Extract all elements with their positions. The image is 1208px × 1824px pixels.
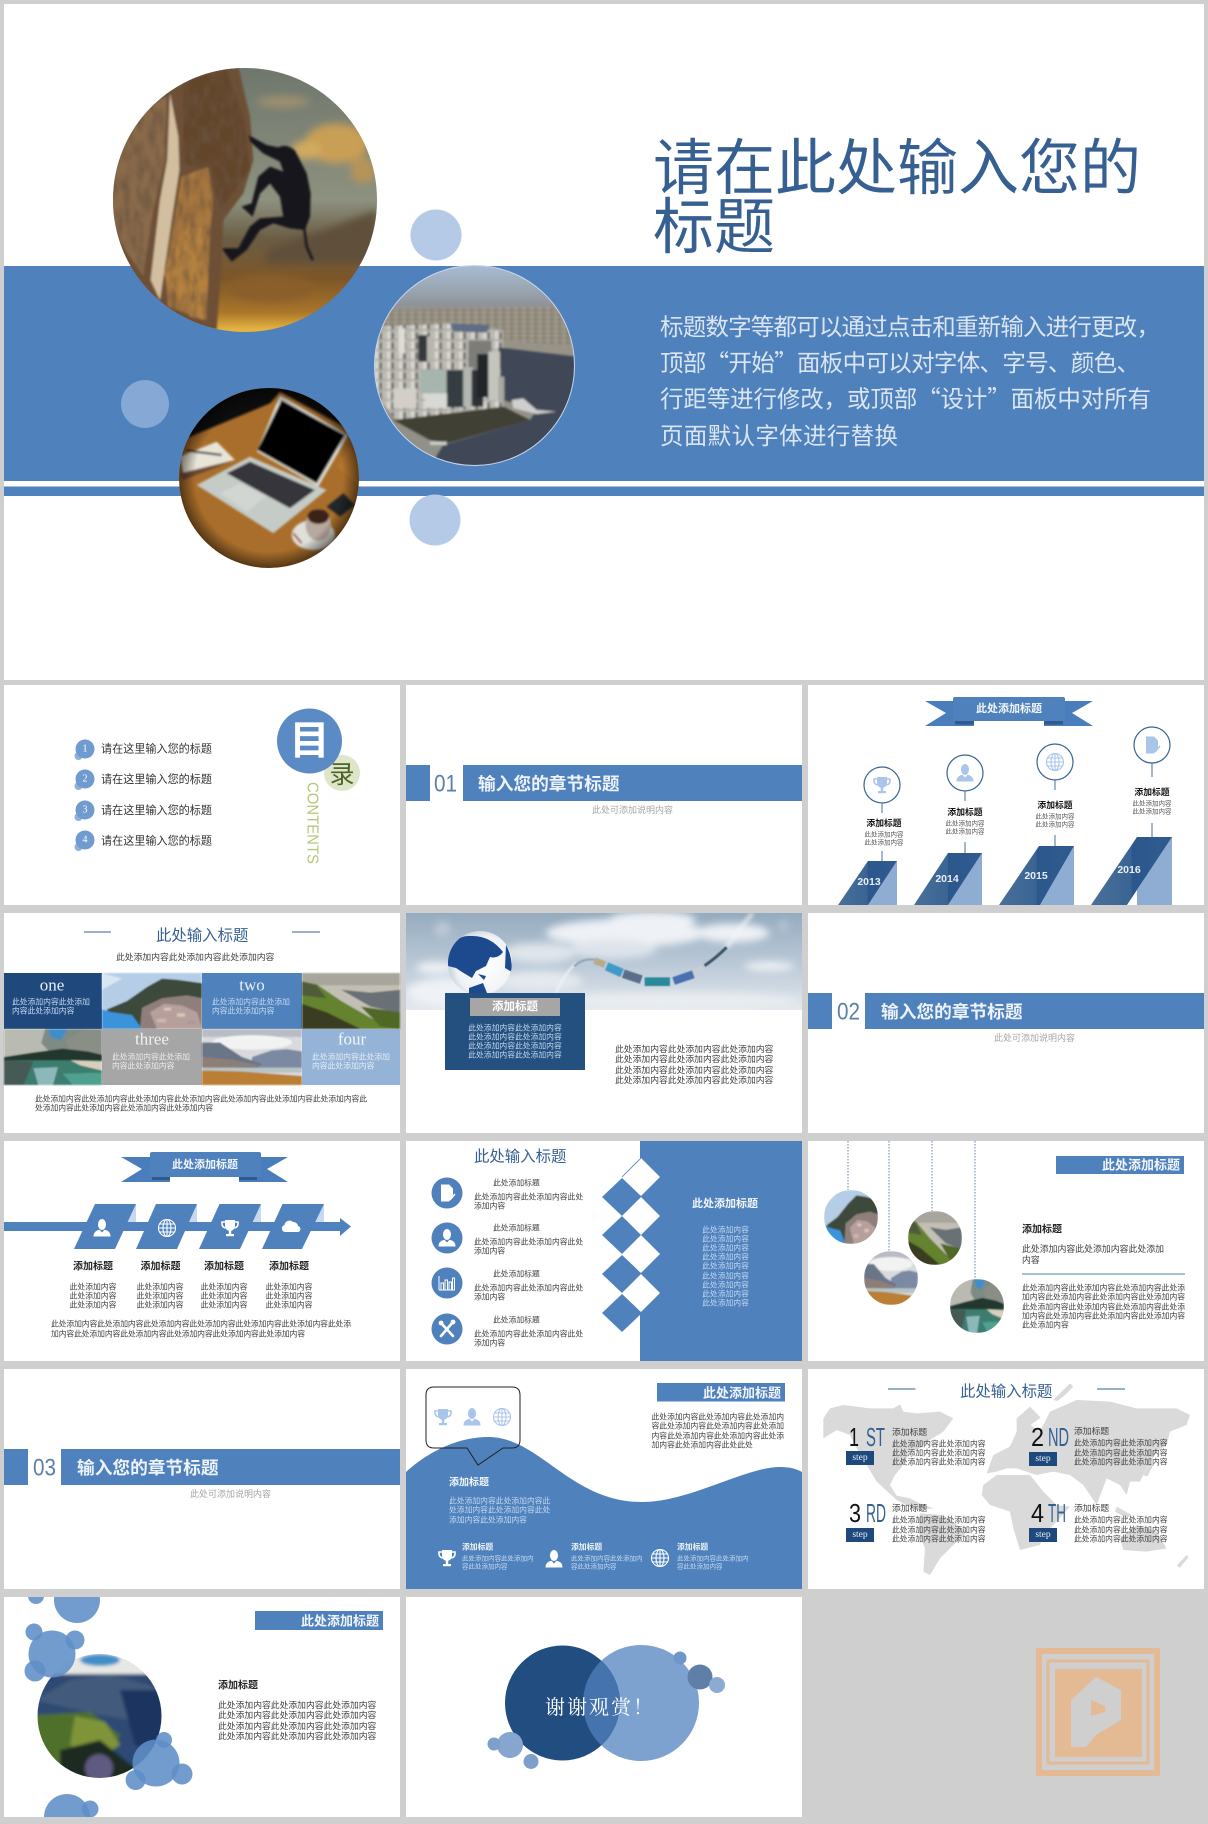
description: 标题数字等都可以通过点击和重新输入进行更改， <box>660 308 1160 342</box>
feature 2: 此处添加内容此处添加内 <box>571 1554 642 1562</box>
heading: 此处输入标题 <box>960 1382 1052 1400</box>
callout box: 此处添加内容此处添加内容 <box>468 1032 562 1042</box>
step labels: 此处添加内容 <box>201 1300 248 1310</box>
目录 badge: 录 <box>329 761 355 789</box>
feature 3: 容此处添加内容 <box>677 1562 723 1570</box>
timeline step 2015 <box>999 744 1075 905</box>
panel heading and text: 此处添加内容 <box>702 1252 749 1262</box>
landscape photo circle <box>38 1654 162 1778</box>
panel: wave slide <box>406 1369 802 1589</box>
film strip ribbon <box>574 947 727 982</box>
tile: one <box>4 973 102 1029</box>
header tag <box>255 1611 383 1630</box>
diamond column <box>602 1158 660 1332</box>
list item 2: 添加内容 <box>474 1246 505 1256</box>
contents list: 3 <box>82 804 88 816</box>
panel: section 02 <box>808 913 1204 1133</box>
step labels: 添加标题 <box>73 1260 113 1272</box>
step labels: 添加标题 <box>140 1260 180 1272</box>
contents list: 4 <box>82 834 88 846</box>
text block: 此处添加内容此处添加内容此处添加内容 <box>218 1730 377 1741</box>
step 1ST: 此处添加内容此处添加内容 <box>892 1438 986 1448</box>
header tag <box>1056 1156 1184 1174</box>
tile: one: 内容此处添加内容 <box>12 1006 75 1016</box>
step 1ST: step <box>852 1453 868 1463</box>
thin blue stripe <box>4 486 1204 496</box>
section number: 03 <box>33 1454 56 1482</box>
header tag: 此处添加标题 <box>301 1614 379 1628</box>
panel: cover slide <box>4 4 1204 680</box>
panel heading and text: 此处添加标题 <box>692 1196 758 1210</box>
sky banner photo <box>406 911 802 1010</box>
step labels: 此处添加内容 <box>266 1282 313 1292</box>
step labels: 此处添加内容 <box>70 1290 117 1300</box>
step 1ST: 此处添加内容此处添加内容 <box>892 1456 986 1466</box>
timeline step 2016: 2016 <box>1117 864 1141 876</box>
step 3RD: 此处添加内容此处添加内容 <box>892 1534 986 1544</box>
step labels <box>70 1260 313 1310</box>
panel: diamonds list slide <box>406 1141 802 1361</box>
bubble cluster <box>24 1597 192 1817</box>
step 4TH: 4 <box>1031 1498 1044 1528</box>
ribbon heading: 此处添加标题 <box>976 701 1042 715</box>
wave text: 添加内容此处添加内容 <box>449 1514 527 1524</box>
step 1ST: 添加标题 <box>892 1426 927 1437</box>
header tag: 此处添加标题 <box>703 1386 781 1400</box>
feature 3: 此处添加内容此处添加内 <box>677 1554 748 1562</box>
step 2ND: 2 <box>1031 1422 1044 1452</box>
photo: climber <box>110 60 380 340</box>
text block <box>218 1678 377 1741</box>
callout box: 此处添加内容此处添加内容 <box>468 1022 562 1032</box>
body text: 此处添加内容此处添加内容此处添加内容 <box>615 1064 774 1075</box>
step 2ND <box>1029 1422 1168 1466</box>
step labels: 此处添加内容 <box>201 1290 248 1300</box>
panel: section 03 <box>4 1369 400 1589</box>
feature 2: 添加标题 <box>571 1542 602 1552</box>
right text <box>652 1412 784 1450</box>
timeline step 2015: 此处添加内容 <box>1036 820 1075 828</box>
description: 顶部“开始”面板中可以对字体、字号、颜色、 <box>660 344 1140 378</box>
feature 1: 添加标题 <box>462 1542 493 1552</box>
step labels: 此处添加内容 <box>266 1300 313 1310</box>
decorative dot: bottom <box>410 494 460 546</box>
step labels: 此处添加内容 <box>201 1282 248 1292</box>
heading: 此处输入标题 <box>156 926 248 944</box>
section number: 01 <box>434 770 457 798</box>
tile: one: one <box>40 976 64 994</box>
callout box <box>445 993 585 1070</box>
thank you text: 谢谢观赏！ <box>545 1696 653 1719</box>
title <box>653 134 1141 261</box>
feature 3 <box>652 1542 748 1570</box>
photo: green mountain <box>302 973 400 1029</box>
timeline step 2013: 2013 <box>857 876 881 888</box>
tile: two: 内容此处添加内容 <box>212 1006 275 1016</box>
globe icon <box>446 931 512 996</box>
blue wave <box>406 1437 802 1589</box>
description: 行距等进行修改，或顶部“设计”面板中对所有 <box>660 380 1151 414</box>
hanging strings <box>848 1141 975 1279</box>
step labels: 此处添加内容 <box>266 1290 313 1300</box>
overlapping circles <box>505 1645 699 1761</box>
panel heading and text: 此处添加内容 <box>702 1288 749 1298</box>
panel: world map slide <box>808 1369 1204 1589</box>
callout box: 添加标题 <box>492 999 538 1013</box>
panel: photo tiles slide <box>4 913 400 1133</box>
step 3RD: 3 <box>849 1498 861 1528</box>
step 3RD: step <box>852 1530 868 1540</box>
list item 3: 此处添加内容此处添加内容此处 <box>474 1282 583 1292</box>
panel: hanging photos slide <box>808 1141 1204 1361</box>
timeline step 2016: 添加标题 <box>1134 786 1170 797</box>
timeline step 2013: 此处添加内容 <box>864 830 904 838</box>
contents list: 请在这里输入您的标题 <box>101 803 212 817</box>
panel heading and text: 此处添加内容 <box>702 1234 749 1244</box>
contents list: 请在这里输入您的标题 <box>101 772 212 786</box>
tile: four: 内容此处添加内容 <box>312 1060 375 1070</box>
photo ball: lake <box>950 1279 1004 1333</box>
photo ball: green mountain <box>908 1211 962 1265</box>
panel: globe slide <box>406 911 802 1133</box>
text block: 此处添加内容此处添加内容此处添加内容此处添 <box>1022 1302 1185 1312</box>
text block: 内容 <box>1022 1254 1040 1265</box>
timeline step 2013 <box>838 767 904 905</box>
timeline step 2016: 此处添加内容 <box>1132 798 1172 808</box>
blue band <box>4 266 1204 481</box>
section note: 此处可添加说明内容 <box>190 1488 271 1499</box>
contents list: 2 <box>82 774 88 784</box>
panel: bubbles photo slide <box>4 1597 400 1817</box>
callout box: 此处添加内容此处添加内容 <box>468 1050 562 1060</box>
photo: coastal village <box>102 973 202 1029</box>
step labels: 添加标题 <box>204 1260 244 1272</box>
tile: three: 此处添加内容此处添加 <box>112 1052 190 1062</box>
decorative dot: top <box>410 210 462 260</box>
feature 2: 容此处添加内容 <box>571 1562 617 1570</box>
step 3RD: RD <box>866 1498 886 1528</box>
city ring <box>374 266 574 466</box>
timeline step 2013: 添加标题 <box>866 817 902 828</box>
right text: 此处添加内容此处添加内容此处添加内 <box>652 1412 784 1422</box>
step 2ND: 添加标题 <box>1074 1425 1109 1436</box>
satellite bubbles <box>488 1652 725 1769</box>
contents list: 1 <box>82 744 88 754</box>
right text: 容此处添加内容此处添加内容此处添加 <box>652 1420 784 1430</box>
panel: arrow process slide <box>4 1141 400 1361</box>
photo: city <box>370 263 580 470</box>
step 3RD: 添加标题 <box>892 1502 927 1513</box>
list item 4: 此处添加标题 <box>493 1314 540 1324</box>
目录 badge: 目 <box>290 719 330 763</box>
timeline step 2014: 此处添加内容 <box>946 826 985 836</box>
list item 1 <box>432 1178 583 1210</box>
text block: 加内容此处添加内容此处添加内容此处添加内容 <box>1022 1292 1185 1302</box>
timeline step 2016 <box>1091 727 1172 905</box>
section title: 输入您的章节标题 <box>77 1457 219 1478</box>
contents list: 请在这里输入您的标题 <box>101 742 212 756</box>
body text: 加内容此处添加内容此处添加内容此处添加内容此处添加内容此处添加内容 <box>51 1328 305 1338</box>
contents list: 请在这里输入您的标题 <box>101 834 212 848</box>
text block: 此处添加内容此处添加内容此处添加内容 <box>218 1709 377 1720</box>
subheading: 此处添加内容此处添加内容此处添加内容 <box>116 951 275 962</box>
tile: four: four <box>338 1030 366 1048</box>
photo ball: village <box>824 1190 878 1244</box>
step 2ND: 此处添加内容此处添加内容 <box>1074 1456 1168 1466</box>
world map <box>823 1383 1190 1575</box>
body text: 处添加内容此处添加内容此处添加内容此处添加内容 <box>35 1102 213 1112</box>
panel: contents slide <box>4 685 400 905</box>
text block: 此处添加内容此处添加内容此处添加 <box>1022 1243 1164 1254</box>
speech bubble with icons <box>426 1387 520 1465</box>
list item 4: 此处添加内容此处添加内容此处 <box>474 1328 583 1338</box>
step 3RD: 此处添加内容此处添加内容 <box>892 1514 986 1524</box>
text block: 添加标题 <box>218 1678 258 1692</box>
step 4TH <box>1029 1498 1168 1544</box>
header tag: 此处添加标题 <box>1102 1158 1180 1172</box>
list item 3: 此处添加标题 <box>493 1268 540 1278</box>
目录 badge <box>277 708 360 791</box>
panel heading and text: 此处添加内容 <box>702 1298 749 1308</box>
step 4TH: step <box>1035 1530 1051 1540</box>
step labels: 此处添加内容 <box>70 1282 117 1292</box>
tile: three <box>102 1029 202 1085</box>
list item 1: 添加内容 <box>474 1200 505 1210</box>
timeline step 2014: 2014 <box>935 873 959 885</box>
right blue panel <box>640 1141 802 1361</box>
feature 1: 容此处添加内容 <box>462 1562 508 1570</box>
panel: timeline slide <box>808 685 1204 905</box>
step 3RD: 此处添加内容此处添加内容 <box>892 1524 986 1534</box>
title: 请在此处输入您的 <box>653 134 1141 202</box>
timeline step 2016: 此处添加内容 <box>1132 806 1172 816</box>
body text: 此处添加内容此处添加内容此处添加内容 <box>615 1053 774 1064</box>
step labels: 此处添加内容 <box>137 1300 184 1310</box>
step 2ND: step <box>1035 1454 1051 1464</box>
text block <box>1022 1222 1185 1330</box>
step 3RD <box>846 1498 986 1544</box>
text block: 加内容此处添加内容此处添加内容此处添加内容 <box>1022 1310 1185 1320</box>
step 4TH: 此处添加内容此处添加内容 <box>1074 1524 1168 1534</box>
photo ball: desert <box>864 1251 918 1305</box>
timeline step 2015: 2015 <box>1024 870 1048 882</box>
timeline step 2015: 此处添加内容 <box>1036 812 1075 820</box>
step labels: 添加标题 <box>269 1260 309 1272</box>
tile: three: three <box>135 1030 169 1048</box>
step 2ND: ND <box>1048 1422 1069 1452</box>
tile: one: 此处添加内容此处添加 <box>12 996 90 1006</box>
body text: 此处添加内容此处添加内容此处添加内容 <box>615 1043 774 1054</box>
step tiles <box>74 1204 324 1249</box>
step labels: 此处添加内容 <box>137 1282 184 1292</box>
process arrow <box>4 1218 351 1236</box>
text block: 此处添加内容此处添加内容此处添加内容此处添 <box>1022 1282 1185 1292</box>
panel heading and text: 此处添加内容 <box>702 1260 749 1270</box>
tile: two: 此处添加内容此处添加 <box>212 996 290 1006</box>
list item 1: 此处添加内容此处添加内容此处 <box>474 1192 583 1202</box>
body text: 此处添加内容此处添加内容此处添加内容此处添加内容此处添加内容此处添加内容此处添 <box>51 1318 351 1328</box>
step 2ND: 此处添加内容此处添加内容 <box>1074 1438 1168 1448</box>
feature 1: 此处添加内容此处添加内 <box>462 1554 534 1562</box>
tile: four: 此处添加内容此处添加 <box>312 1052 390 1062</box>
ribbon heading: 此处添加标题 <box>172 1157 238 1171</box>
step labels: 此处添加内容 <box>137 1290 184 1300</box>
body text <box>615 1043 774 1085</box>
list item 3 <box>432 1268 583 1302</box>
feature 1 <box>439 1542 534 1570</box>
decorative dot: band <box>121 380 169 428</box>
wave text: 此处添加内容此处添加内容此 <box>449 1496 551 1506</box>
section title: 输入您的章节标题 <box>478 773 620 794</box>
section title: 输入您的章节标题 <box>881 1001 1023 1022</box>
panel heading and text: 此处添加内容 <box>702 1280 749 1290</box>
tile: three: 内容此处添加内容 <box>112 1060 175 1070</box>
list item 2: 此处添加标题 <box>493 1222 540 1232</box>
timeline step 2014: 添加标题 <box>947 806 983 817</box>
text block: 此处添加内容 <box>1022 1320 1069 1330</box>
list item 2 <box>432 1222 583 1256</box>
panel heading and text: 此处添加内容 <box>702 1270 749 1280</box>
heading: 此处输入标题 <box>474 1148 566 1166</box>
description <box>660 308 1160 451</box>
callout box: 此处添加内容此处添加内容 <box>468 1040 562 1050</box>
list item 4 <box>432 1314 583 1348</box>
timeline step 2014 <box>914 755 985 905</box>
text block: 添加标题 <box>1022 1222 1062 1236</box>
panel heading and text <box>692 1196 758 1308</box>
ribbon heading <box>121 1152 288 1182</box>
right text: 加内容此处添加内容此处此处 <box>652 1440 753 1450</box>
section number: 02 <box>837 998 860 1026</box>
text block: 此处添加内容此处添加内容此处添加内容 <box>218 1720 377 1731</box>
ribbon heading <box>925 697 1093 726</box>
list item 2: 此处添加内容此处添加内容此处 <box>474 1236 583 1246</box>
body text: 此处添加内容此处添加内容此处添加内容此处添加内容此处添加内容此处添加内容此处添加内容此 <box>35 1094 367 1104</box>
photo: mountain lake <box>4 1029 102 1085</box>
step labels: 此处添加内容 <box>70 1300 117 1310</box>
tile: two <box>202 973 302 1029</box>
step 2ND: 此处添加内容此处添加内容 <box>1074 1448 1168 1458</box>
tile: four <box>302 1029 400 1085</box>
step 1ST: ST <box>866 1422 885 1452</box>
wave text <box>449 1476 551 1524</box>
step 4TH: 此处添加内容此处添加内容 <box>1074 1514 1168 1524</box>
step 1ST: 此处添加内容此处添加内容 <box>892 1448 986 1458</box>
body text <box>51 1318 351 1338</box>
feature 3: 添加标题 <box>677 1542 708 1552</box>
step 4TH: TH <box>1048 1498 1066 1528</box>
tile: two: two <box>239 976 265 994</box>
wave text: 添加标题 <box>449 1476 489 1488</box>
panel heading and text: 此处添加内容 <box>702 1242 749 1252</box>
timeline step 2013: 此处添加内容 <box>864 838 904 846</box>
description: 页面默认字体进行替换 <box>660 417 898 451</box>
contents list <box>74 740 212 851</box>
list item 1: 此处添加标题 <box>493 1178 540 1188</box>
list item 4: 添加内容 <box>474 1338 505 1348</box>
CONTENTS vertical label: CONTENTS <box>304 782 320 864</box>
title: 标题 <box>653 193 775 261</box>
panel: section 01 <box>406 685 802 905</box>
panel: thank you slide <box>406 1597 802 1817</box>
step 4TH: 添加标题 <box>1074 1502 1109 1513</box>
step 4TH: 此处添加内容此处添加内容 <box>1074 1534 1168 1544</box>
body text <box>35 1094 367 1112</box>
feature 2 <box>546 1542 642 1570</box>
photo: desert lake <box>202 1029 302 1085</box>
step 1ST: 1 <box>849 1422 859 1452</box>
section note: 此处可添加说明内容 <box>994 1032 1075 1043</box>
text block: 此处添加内容此处添加内容此处添加内容 <box>218 1699 377 1710</box>
timeline step 2015: 添加标题 <box>1037 799 1073 810</box>
body text: 此处添加内容此处添加内容此处添加内容 <box>615 1074 774 1085</box>
wave text: 处添加内容此处添加内容此处 <box>449 1504 551 1514</box>
panel heading and text: 此处添加内容 <box>702 1224 749 1234</box>
step 1ST <box>846 1422 986 1466</box>
right text: 内容此处添加内容此处添加内容此处添 <box>652 1430 784 1440</box>
photo: laptop on desk <box>173 387 363 573</box>
watermark stamp <box>1039 1651 1157 1773</box>
timeline step 2014: 此处添加内容 <box>946 818 985 828</box>
section note: 此处可添加说明内容 <box>592 804 673 815</box>
header tag <box>657 1383 785 1402</box>
list item 3: 添加内容 <box>474 1292 505 1302</box>
